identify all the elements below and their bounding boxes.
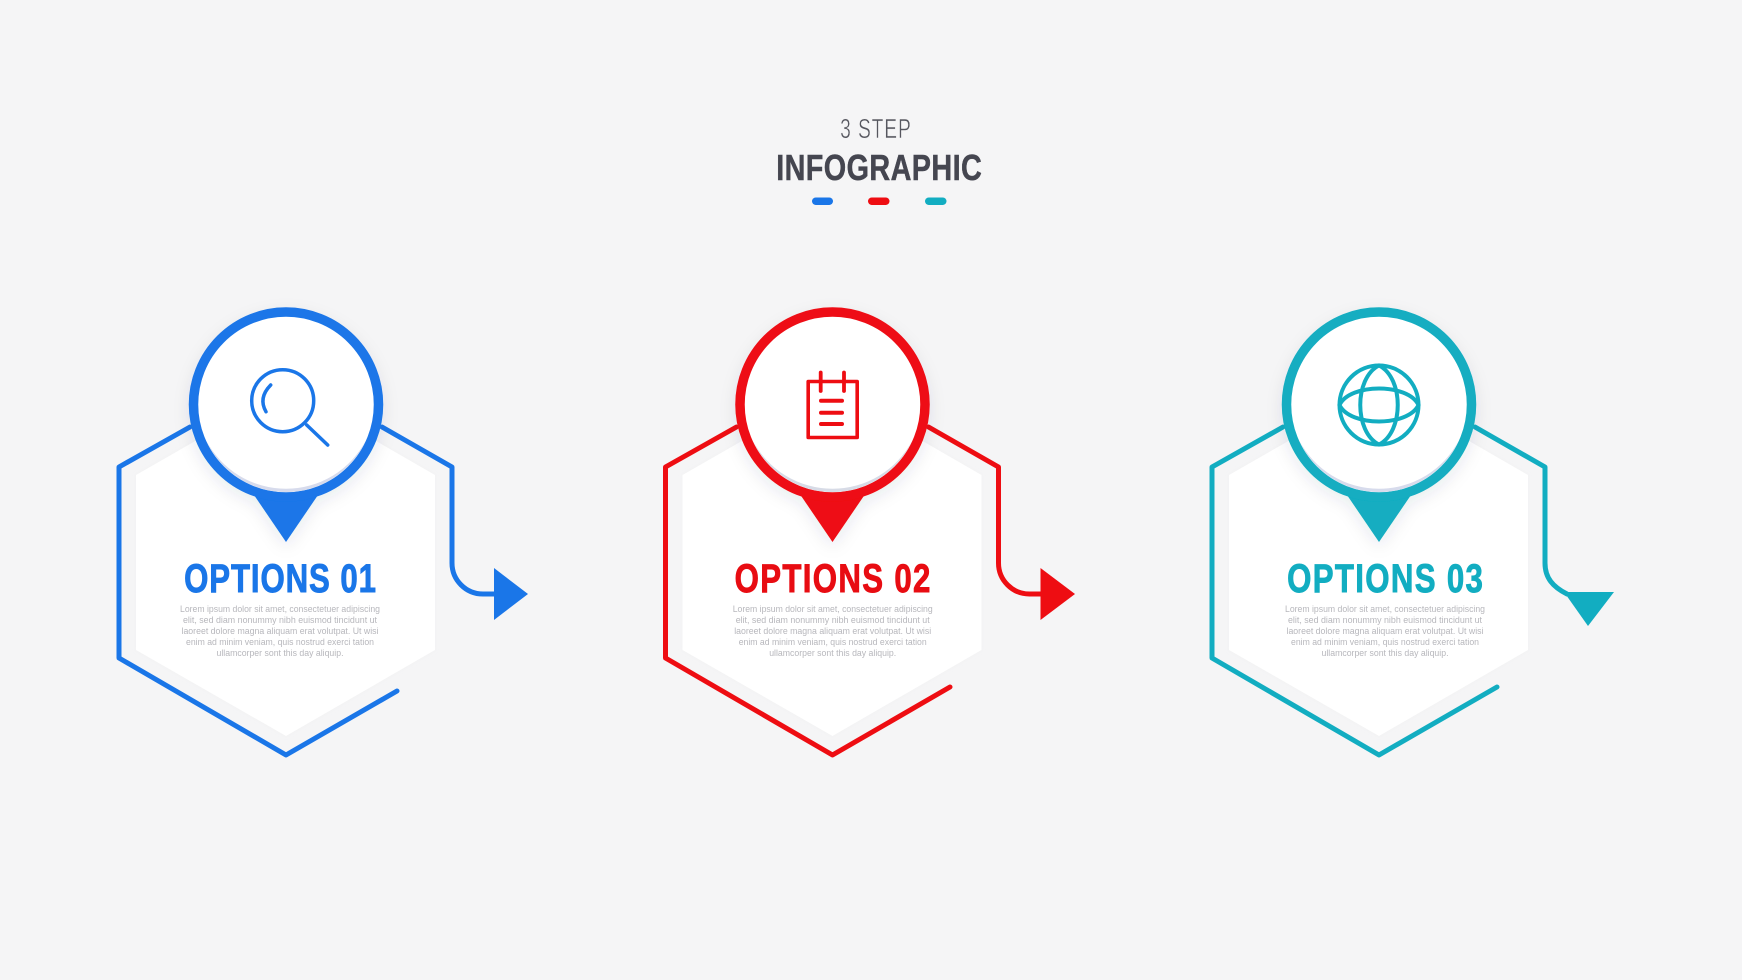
body text: Lorem ipsum dolor sit amet, consectetuer adipiscing: [1285, 604, 1485, 615]
arrowhead: [1564, 592, 1614, 626]
arrowhead: [1040, 568, 1075, 620]
body text: Lorem ipsum dolor sit amet, consectetuer adipiscing: [733, 604, 933, 615]
panel: options 02: [666, 312, 1075, 755]
white hexagon: [1229, 389, 1528, 736]
pin inner shade: [1299, 440, 1459, 492]
hexagon outline with arrow line: [666, 427, 1042, 755]
heading: OPTIONS 02: [735, 556, 930, 601]
pin inner shade: [206, 440, 366, 492]
hexagon outline with arrow line: [1212, 427, 1567, 755]
pin marker: [740, 312, 925, 542]
icon: notepad: [808, 372, 857, 438]
colour dash: teal: [925, 198, 946, 205]
header: [776, 115, 982, 205]
icon: magnifying glass: [252, 370, 328, 445]
body text: [1285, 604, 1485, 659]
body text: elit, sed diam nonummy nibh euismod tincidunt ut: [1288, 615, 1482, 626]
pin marker: [194, 312, 378, 542]
white hexagon: [136, 389, 435, 736]
pin inner shade: [752, 440, 912, 492]
body text: elit, sed diam nonummy nibh euismod tincidunt ut: [183, 615, 377, 626]
body text: ullamcorper sont this day aliquip.: [216, 648, 344, 659]
body text: [733, 604, 933, 659]
colour dash: blue: [812, 198, 833, 205]
body text: laoreet dolore magna aliquam erat volutpat. Ut wisi: [182, 626, 378, 637]
panel: options 01: [119, 312, 528, 755]
title: INFOGRAPHIC: INFOGRAPHIC: [776, 147, 982, 188]
body text: laoreet dolore magna aliquam erat volutpat. Ut wisi: [734, 626, 931, 637]
heading: OPTIONS 01: [184, 556, 376, 601]
arrowhead: [494, 568, 528, 620]
panel: options 03: [1212, 312, 1614, 755]
body text: [180, 604, 380, 659]
body text: enim ad minim veniam, quis nostrud exerci tation: [1291, 637, 1479, 648]
body text: enim ad minim veniam, quis nostrud exerci tation: [739, 637, 927, 648]
hexagon outline with arrow line: [119, 427, 496, 755]
subtitle: 3 STEP: 3 STEP: [840, 115, 911, 145]
body text: enim ad minim veniam, quis nostrud exerci tation: [186, 637, 374, 648]
pin marker: [1286, 312, 1472, 542]
body text: ullamcorper sont this day aliquip.: [769, 648, 896, 659]
white hexagon: [682, 389, 982, 736]
body text: laoreet dolore magna aliquam erat volutpat. Ut wisi: [1286, 626, 1484, 637]
body text: Lorem ipsum dolor sit amet, consectetuer adipiscing: [180, 604, 380, 615]
body text: elit, sed diam nonummy nibh euismod tincidunt ut: [736, 615, 930, 626]
body text: ullamcorper sont this day aliquip.: [1322, 648, 1448, 659]
colour dash: red: [868, 198, 890, 205]
icon: globe: [1340, 366, 1418, 444]
heading: OPTIONS 03: [1287, 556, 1483, 601]
